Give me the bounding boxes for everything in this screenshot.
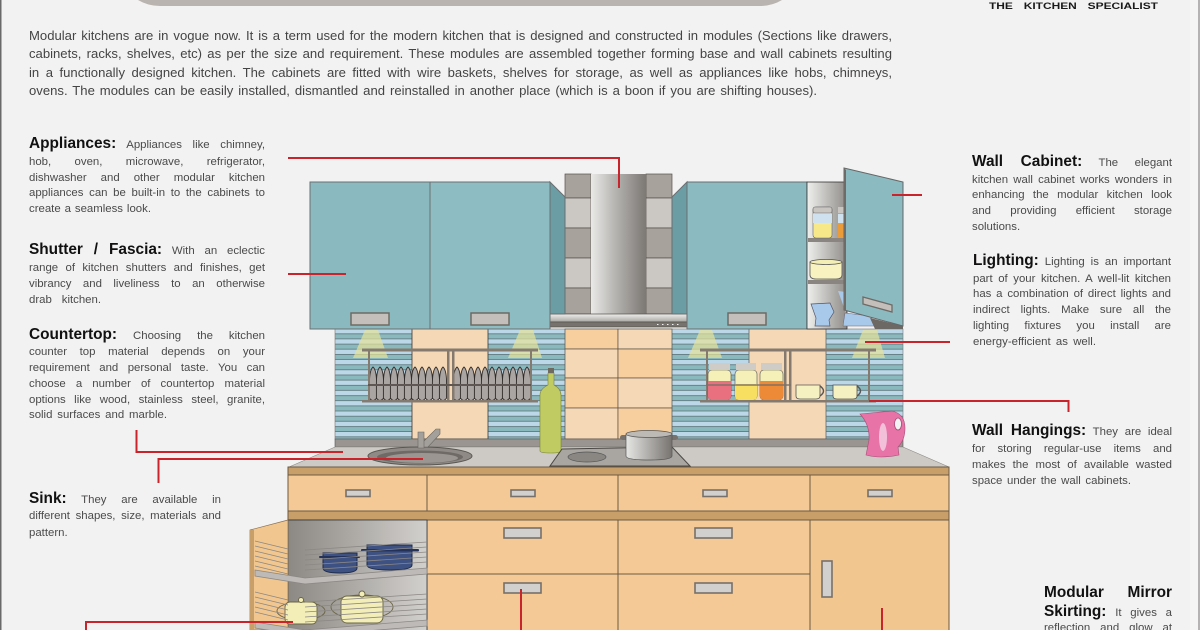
text: lighting: lighting fixtures you install are xyxy=(973,320,1171,332)
intro paragraph: Modular kitchens are in vogue now. It is a term used for the modern kitchen that is designed and constructed in modules (Sections like drawers, xyxy=(29,28,892,43)
text: countertop: options like wood, stainless steel, granite, xyxy=(29,394,265,406)
text: shutter / fascia: vibrancy and liveliness to an otherwise xyxy=(29,278,265,290)
text: shutter / fascia: drab kitchen. xyxy=(29,294,101,306)
intro paragraph xyxy=(29,28,892,98)
tiled panel under chimney xyxy=(565,329,672,439)
cream pots xyxy=(277,591,393,624)
faucet xyxy=(418,429,440,448)
cooking pot xyxy=(620,430,678,460)
cooktop xyxy=(550,447,690,466)
sink xyxy=(368,447,472,465)
wire basket shelves xyxy=(255,541,427,630)
text: lighting: energy-efficient as well. xyxy=(973,336,1096,348)
text: wall hangings: space under the wall cabinets. xyxy=(972,475,1131,487)
base cabinets xyxy=(288,467,949,630)
text: countertop: counter top material depends on your xyxy=(29,346,265,358)
text: wall hangings: makes the most of available wasted xyxy=(972,459,1172,471)
text: wall hangings: for storing regular-use items and xyxy=(972,443,1172,455)
text: appliances: dishwasher and other modular kitchen xyxy=(29,172,265,184)
logo tagline: THE KITCHEN SPECIALIST xyxy=(989,1,1158,11)
callout lines xyxy=(86,158,1068,630)
text: wall cabinet: solutions. xyxy=(972,221,1020,233)
cabinet handles xyxy=(346,490,892,597)
text: appliances: Appliances: Appliances like chimney, xyxy=(29,135,265,152)
text: lighting xyxy=(973,252,1171,348)
dish rack xyxy=(362,348,538,402)
text: countertop xyxy=(29,326,265,421)
text: lighting: part of your kitchen. A well-lit kitchen xyxy=(973,273,1171,285)
bottle xyxy=(540,368,561,453)
backsplash xyxy=(335,329,903,439)
text: wall cabinet: and providing efficient storage xyxy=(972,205,1172,217)
spice rack with jars and cups xyxy=(700,348,876,402)
text: wall hangings: Wall Hangings: They are ideal xyxy=(972,422,1172,439)
text: sink: pattern. xyxy=(29,527,68,539)
intro paragraph: in a functionally designed kitchen. The cabinets are fitted with wire baskets, shelves for storage, as well as appliances like hobs, chimneys, xyxy=(29,65,892,80)
intro paragraph: ovens. The modules can be easily installed, dismantled and reinstalled in another place (which is a boon if you are shifting houses). xyxy=(29,83,817,98)
text: appliances: appliances can be built-in to the cabinets to xyxy=(29,187,265,199)
text: shutter / fascia: Shutter / Fascia: With an eclectic xyxy=(29,241,265,258)
text: shutter / fascia: range of kitchen shutters and finishes, get xyxy=(29,262,265,274)
text: lighting: Lighting: Lighting is an important xyxy=(973,252,1171,269)
kettle xyxy=(860,411,905,457)
intro paragraph: cabinets, racks, shelves, etc) as per the size and requirement. These modules are assembled together forming base and wall cabinets resulting xyxy=(29,46,892,61)
text: countertop: requirement and personal taste. You can xyxy=(29,362,265,374)
open corner cabinet xyxy=(250,520,427,630)
open cabinet door xyxy=(844,168,903,326)
under-cabinet lights xyxy=(353,330,885,358)
text: countertop: solid surfaces and marble. xyxy=(29,409,167,421)
countertop xyxy=(289,439,949,467)
text: sink: Sink: They are available in xyxy=(29,490,221,507)
text: appliances: create a seamless look. xyxy=(29,203,151,215)
text: shutter / fascia xyxy=(29,241,265,306)
text: wall cabinet: kitchen wall cabinet works wonders in xyxy=(972,174,1172,186)
text: sink xyxy=(29,490,221,539)
text: wall cabinet xyxy=(972,153,1172,233)
text: wall cabinet: enhancing the modular kitchen look xyxy=(972,189,1172,201)
text: countertop: choose a number of countertop material xyxy=(29,378,265,390)
text: wall hangings xyxy=(972,422,1172,487)
text: lighting: has a combination of direct lights and xyxy=(973,288,1171,300)
text: wall cabinet: Wall Cabinet: The elegant xyxy=(972,153,1172,170)
text: appliances: hob, oven, microwave, refrigerator, xyxy=(29,156,265,168)
open cabinet interior xyxy=(807,182,903,329)
text: modular mirror skirting: Skirting: It gives a xyxy=(1044,603,1172,620)
wall cabinets xyxy=(310,182,807,329)
text: sink: different shapes, size, materials and xyxy=(29,510,221,522)
text: appliances xyxy=(29,135,265,215)
header bar xyxy=(138,0,782,6)
text: countertop: Countertop: Choosing the kitchen xyxy=(29,326,265,343)
chimney xyxy=(550,174,688,327)
blue pots xyxy=(319,545,419,573)
text: modular mirror skirting xyxy=(1044,585,1172,630)
text: lighting: indirect lights. Make sure all the xyxy=(973,304,1171,316)
